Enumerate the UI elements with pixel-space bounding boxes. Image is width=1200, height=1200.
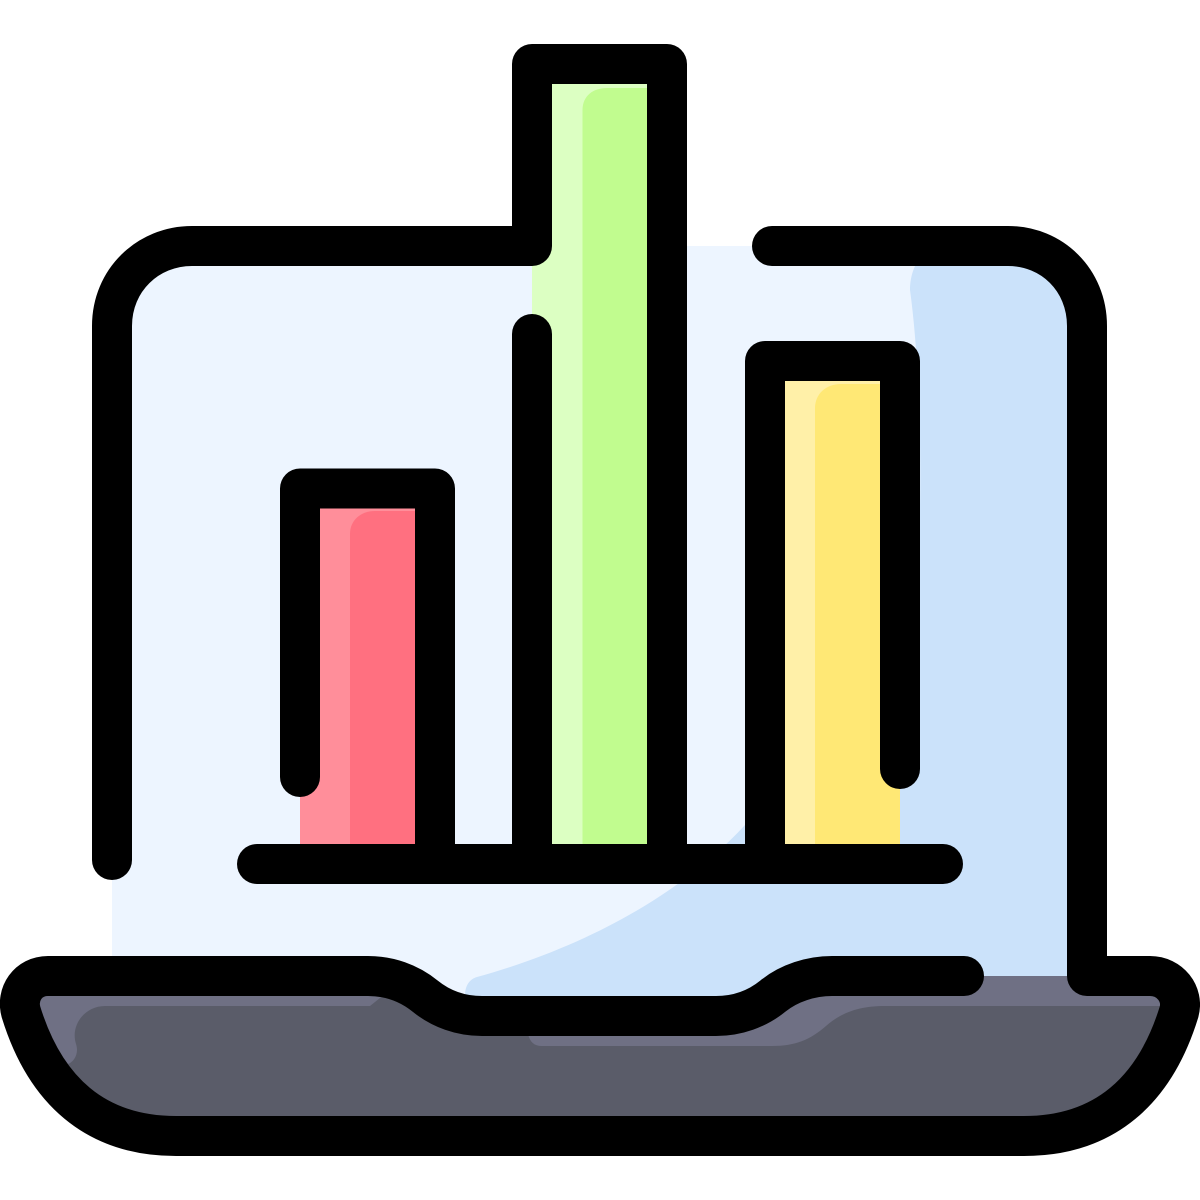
screen outline right	[20, 246, 1180, 1136]
bar: yellow	[765, 361, 900, 864]
yellow bar outline	[765, 361, 900, 864]
bar: red	[300, 488, 435, 864]
green bar inner line	[512, 334, 552, 864]
screen outline left	[112, 64, 667, 864]
red bar outline	[300, 488, 435, 864]
laptop base	[20, 976, 1180, 1136]
bar: green	[532, 64, 667, 864]
baseline	[257, 844, 943, 884]
laptop screen	[112, 246, 1087, 1000]
